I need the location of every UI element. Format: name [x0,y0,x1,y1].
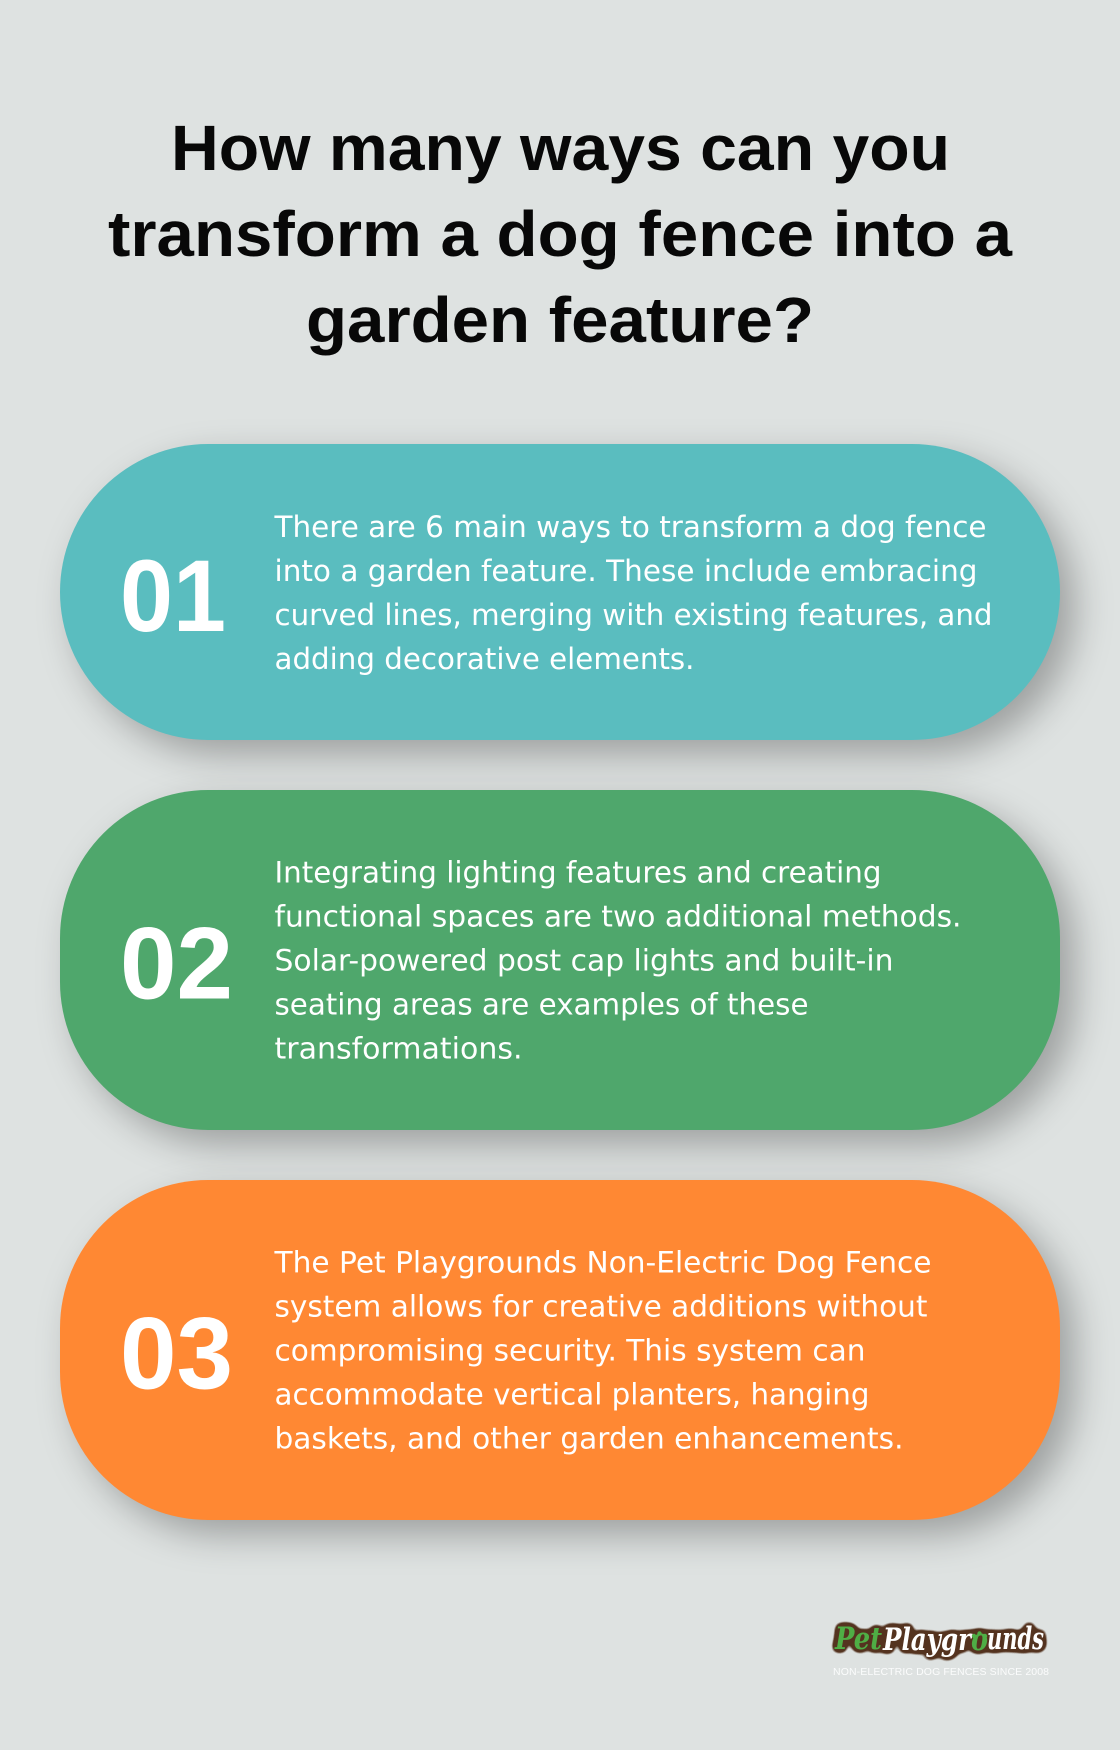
logo tagline: NON-ELECTRIC DOG FENCES SINCE 2008 [833,1666,1049,1678]
step 03 text: system allows for creative additions without [274,1290,928,1324]
panel: step 02 [60,790,1060,1130]
teal pill background [60,444,1060,740]
title [108,112,1012,356]
title: How many ways can you [171,112,950,184]
step 03 text: compromising security. This system can [274,1334,866,1368]
step 03 text: The Pet Playgrounds Non-Electric Dog Fence [273,1246,932,1280]
logo wordmark: Playgr [882,1622,973,1658]
logo: Pet Playgrounds [833,1621,1049,1678]
orange pill background [60,1180,1060,1520]
step 02 text: functional spaces are two additional methods. [274,900,962,934]
step 02 text: seating areas are examples of these [274,988,808,1022]
step 01 text: adding decorative elements. [274,642,694,676]
number 02: 02 [120,906,233,1020]
step 02 text: transformations. [274,1032,522,1066]
panel: step 03 [60,1180,1060,1520]
step 03 text: accommodate vertical planters, hanging [274,1378,870,1412]
title: garden feature? [306,284,814,356]
step 02 text: Solar-powered post cap lights and built-in [274,944,894,978]
green pill background [60,790,1060,1130]
logo wordmark: unds [987,1621,1044,1657]
number 03: 03 [120,1296,233,1410]
logo wordmark [834,1621,1044,1658]
panel: step 01 [60,444,1060,740]
title: transform a dog fence into a [108,198,1012,270]
number 01: 01 [120,539,226,653]
step 01 text: There are 6 main ways to transform a dog fence [273,510,986,544]
step 01 text: curved lines, merging with existing features, and [274,598,992,632]
paw toes on the o [972,1631,987,1638]
step 03 text [273,1246,932,1456]
step 02 text [274,856,962,1066]
step 03 text: baskets, and other garden enhancements. [274,1422,904,1456]
logo wordmark: o [971,1622,988,1658]
step 01 text [273,510,992,676]
logo wordmark: Pet [834,1621,883,1657]
step 01 text: into a garden feature. These include embracing [274,554,978,588]
step 02 text: Integrating lighting features and creating [274,856,882,890]
